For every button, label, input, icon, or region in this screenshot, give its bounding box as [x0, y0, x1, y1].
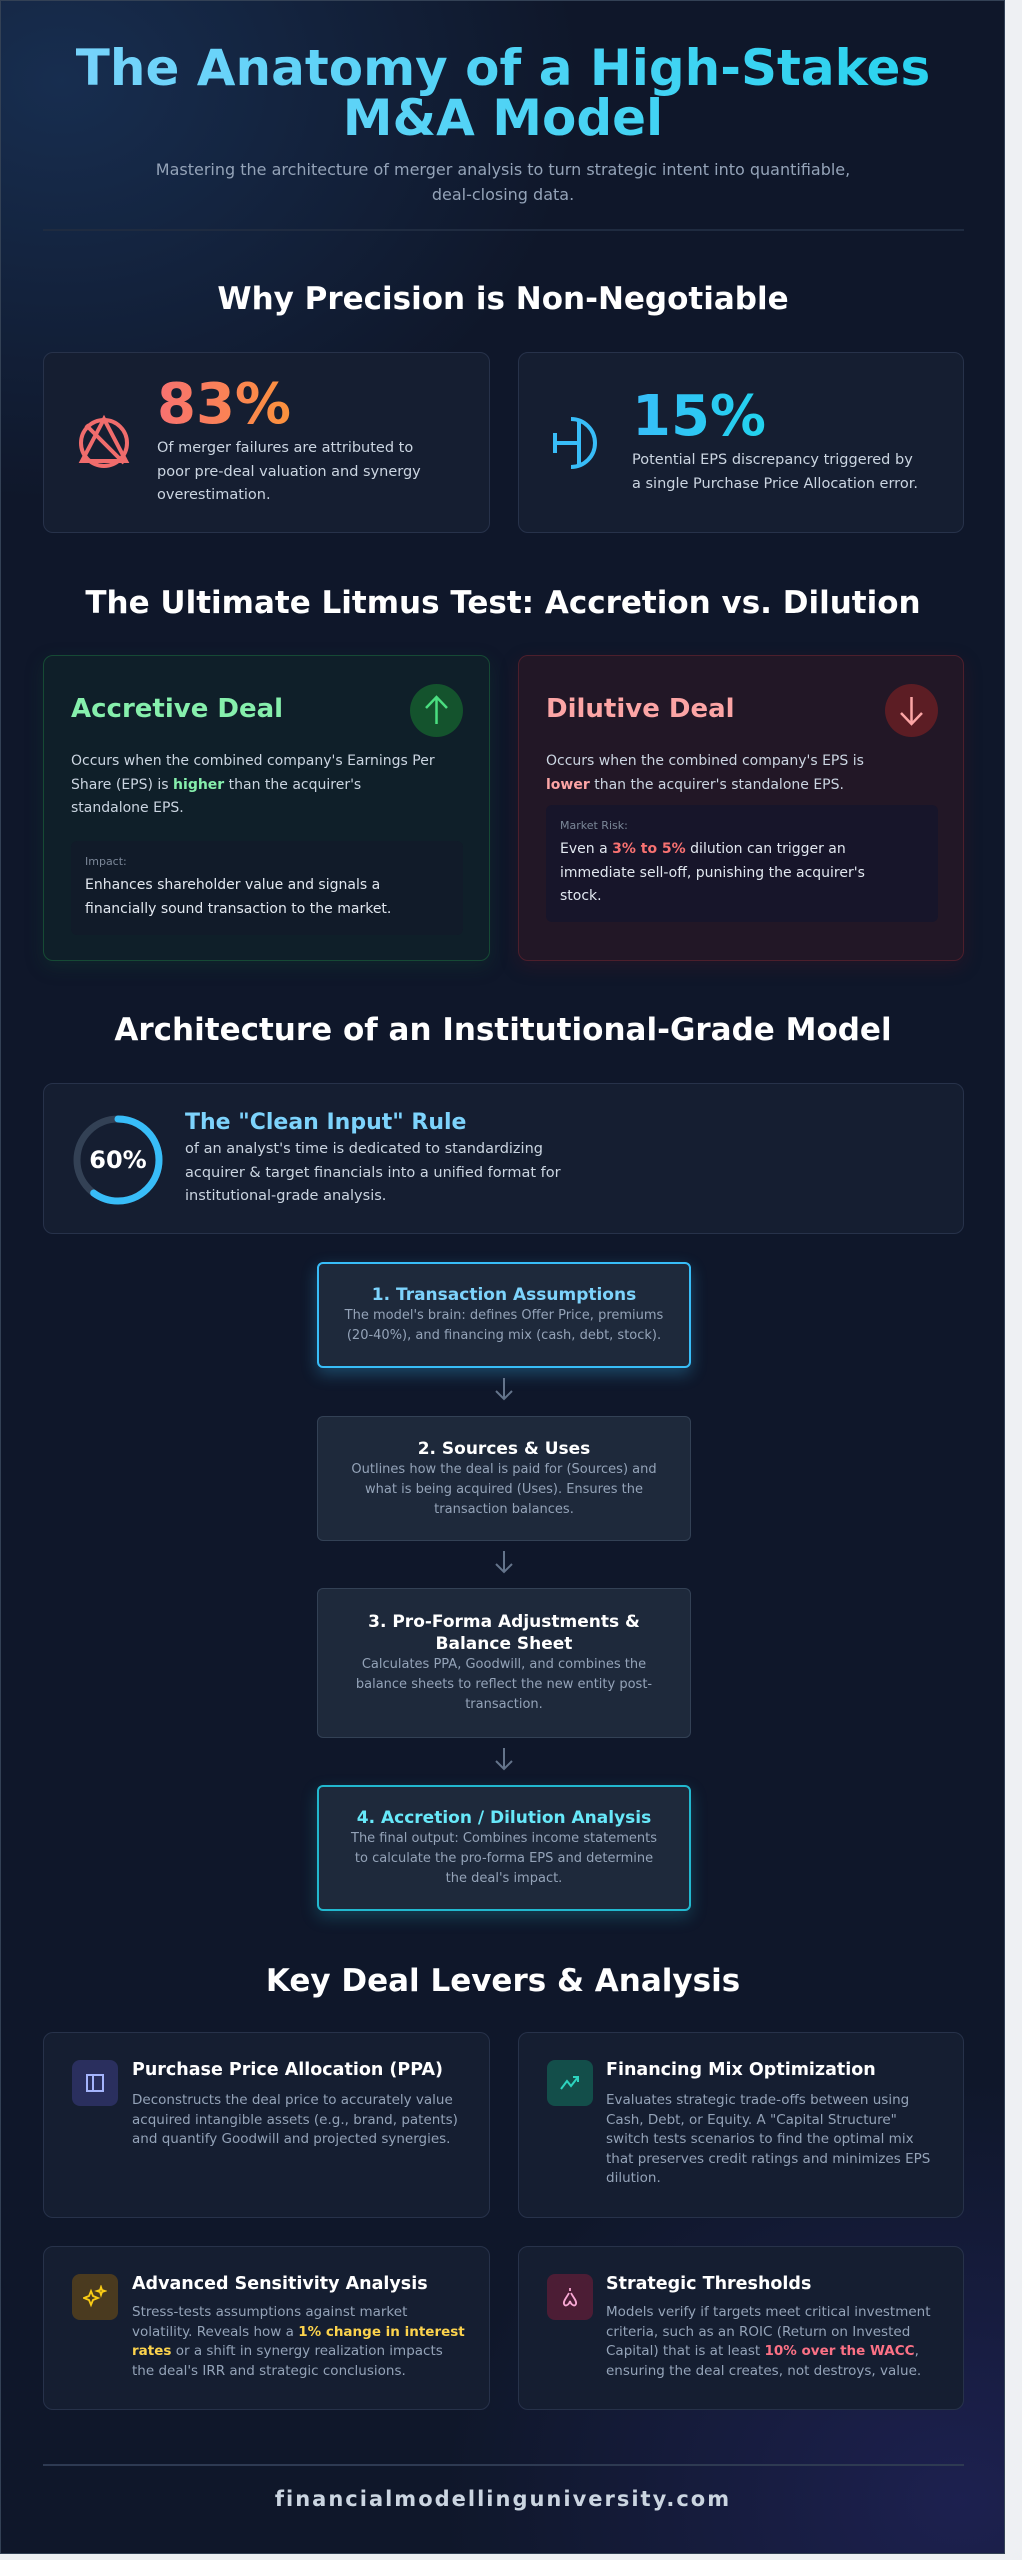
panel: thresholds: Models verify if targets meet critical investment	[606, 2304, 931, 2320]
impact box: financially sound transaction to the market.	[85, 900, 391, 916]
panel: 15% stat	[518, 352, 964, 533]
impact box: Impact:	[85, 855, 127, 868]
stat number: 83%	[157, 372, 291, 437]
heading: why precision: Why Precision is Non-Negotiable	[217, 281, 789, 317]
title	[1, 43, 1005, 143]
panel: PPA: acquired intangible assets (e.g., brand, patents)	[132, 2112, 458, 2128]
step 1: (20-40%), and financing mix (cash, debt, stock).	[347, 1328, 661, 1343]
ring chart 60%	[74, 1116, 162, 1204]
step 3: Calculates PPA, Goodwill, and combines the	[362, 1657, 646, 1672]
impact box: Enhances shareholder value and signals a	[85, 877, 380, 893]
arrow 2	[495, 1551, 513, 1574]
panel: sensitivity: the deal's IRR and strategic conclusions.	[132, 2362, 406, 2378]
dilutive text: Occurs when the combined company's EPS is	[546, 753, 864, 769]
panel: 83% stat	[43, 352, 490, 533]
icon: sparkles	[72, 2274, 118, 2320]
panel: financing mix: switch tests scenarios to find the optimal mix	[606, 2131, 914, 2147]
heading: architecture: Architecture of an Institutional-Grade Model	[114, 1012, 892, 1048]
step 3	[317, 1588, 691, 1738]
arrow 1	[495, 1378, 513, 1400]
panel: financing mix: dilution.	[606, 2170, 661, 2186]
accretive text: Share (EPS) is higher than the acquirer's	[71, 776, 361, 792]
panel: accretive	[43, 655, 490, 961]
ring chart 60%: 60%	[89, 1146, 147, 1174]
panel: thresholds: Capital) that is at least 10% over the WACC,	[606, 2343, 919, 2359]
panel: clean input rule	[43, 1083, 964, 1234]
step 2: transaction balances.	[434, 1502, 574, 1516]
panel: thresholds: ensuring the deal creates, not destroys, value.	[606, 2362, 921, 2378]
dilutive title: Dilutive Deal	[546, 694, 735, 724]
panel: financing mix: Cash, Debt, or Equity. A "Capital Structure"	[606, 2112, 897, 2128]
clean input text: of an analyst's time is dedicated to standardizing	[185, 1141, 543, 1157]
subtitle	[156, 160, 850, 204]
step 4: the deal's impact.	[446, 1871, 562, 1886]
icon: thresholds	[547, 2274, 593, 2320]
title: M&A Model	[343, 89, 663, 147]
step 2: Outlines how the deal is paid for (Sources) and	[351, 1462, 657, 1476]
stat number: 15%	[632, 384, 766, 449]
market risk box: immediate sell-off, punishing the acquirer's	[560, 864, 865, 880]
clean input text: acquirer & target financials into a unified format for	[185, 1164, 561, 1180]
icon: warning	[78, 414, 130, 468]
step 4: to calculate the pro-forma EPS and determine	[355, 1851, 653, 1866]
panel: financing mix	[518, 2032, 964, 2218]
market risk box: stock.	[560, 888, 602, 904]
stat text	[157, 440, 421, 503]
panel: sensitivity: rates or a shift in synergy realization impacts	[132, 2343, 443, 2359]
subtitle: deal-closing data.	[432, 185, 574, 204]
clean input text	[185, 1141, 561, 1204]
market risk box	[546, 805, 938, 922]
arrow 3	[495, 1748, 513, 1770]
step 2: 2. Sources & Uses	[418, 1438, 590, 1458]
step 1: The model's brain: defines Offer Price, premiums	[345, 1308, 663, 1323]
step 3: transaction.	[465, 1697, 543, 1712]
clean input title: The "Clean Input" Rule	[185, 1110, 466, 1135]
step 4	[317, 1785, 691, 1911]
stat text	[632, 452, 918, 492]
icon: down arrow	[885, 684, 938, 737]
icon: up arrow	[410, 684, 463, 737]
panel: thresholds: criteria, such as an ROIC (Return on Invested	[606, 2324, 910, 2340]
accretive text	[71, 753, 435, 816]
step 1	[317, 1262, 691, 1368]
panel: financing mix: Evaluates strategic trade-offs between using	[606, 2092, 909, 2108]
heading: key deal levers: Key Deal Levers & Analysis	[266, 1963, 740, 1999]
stat text: Potential EPS discrepancy triggered by	[632, 452, 913, 468]
accretive text: standalone EPS.	[71, 800, 184, 816]
step 2: what is being acquired (Uses). Ensures the	[365, 1482, 643, 1496]
dilutive text	[546, 753, 864, 792]
icon: trend	[547, 2060, 593, 2106]
step 3: balance sheets to reflect the new entity post-	[356, 1677, 652, 1692]
stat text: poor pre-deal valuation and synergy	[157, 464, 421, 480]
panel: sensitivity: Stress-tests assumptions against market	[132, 2304, 407, 2320]
panel: financing mix: Financing Mix Optimization	[606, 2060, 876, 2080]
market risk box: Even a 3% to 5% dilution can trigger an	[560, 841, 846, 857]
stat text: Of merger failures are attributed to	[157, 440, 413, 456]
stat text: overestimation.	[157, 487, 271, 503]
accretive title: Accretive Deal	[71, 694, 283, 724]
title: The Anatomy of a High-Stakes	[76, 39, 930, 97]
accretive text: Occurs when the combined company's Earnings Per	[71, 753, 435, 769]
dilutive text: lower than the acquirer's standalone EPS.	[546, 776, 844, 792]
panel: thresholds: Strategic Thresholds	[606, 2274, 811, 2294]
panel: thresholds	[518, 2246, 964, 2410]
panel: financing mix: that preserves credit ratings and minimizes EPS	[606, 2150, 930, 2166]
subtitle: Mastering the architecture of merger analysis to turn strategic intent into quantifiable,	[156, 160, 850, 179]
panel: PPA: and quantify Goodwill and projected synergies.	[132, 2131, 450, 2147]
panel: sensitivity	[43, 2246, 490, 2410]
clean input text: institutional-grade analysis.	[185, 1188, 386, 1204]
impact box	[71, 841, 463, 935]
icon: target	[553, 417, 597, 469]
panel: dilutive	[518, 655, 964, 961]
panel: PPA: Deconstructs the deal price to accurately value	[132, 2092, 453, 2108]
step 3: 3. Pro-Forma Adjustments &	[368, 1612, 640, 1632]
panel: PPA: Purchase Price Allocation (PPA)	[132, 2060, 443, 2080]
step 3: Balance Sheet	[436, 1634, 572, 1654]
heading: accretion vs dilution: The Ultimate Litmus Test: Accretion vs. Dilution	[85, 585, 921, 621]
icon: PPA	[72, 2060, 118, 2106]
step 2	[317, 1416, 691, 1541]
step 1: 1. Transaction Assumptions	[372, 1285, 636, 1305]
step 4: 4. Accretion / Dilution Analysis	[357, 1808, 651, 1828]
footer: financialmodellinguniversity.com	[275, 2487, 731, 2511]
panel: sensitivity: volatility. Reveals how a 1% change in interest	[132, 2324, 465, 2340]
step 4: The final output: Combines income statements	[351, 1831, 657, 1846]
stat text: a single Purchase Price Allocation error.	[632, 476, 918, 492]
panel: PPA	[43, 2032, 490, 2218]
market risk box: Market Risk:	[560, 819, 628, 832]
panel: sensitivity: Advanced Sensitivity Analysis	[132, 2274, 428, 2294]
